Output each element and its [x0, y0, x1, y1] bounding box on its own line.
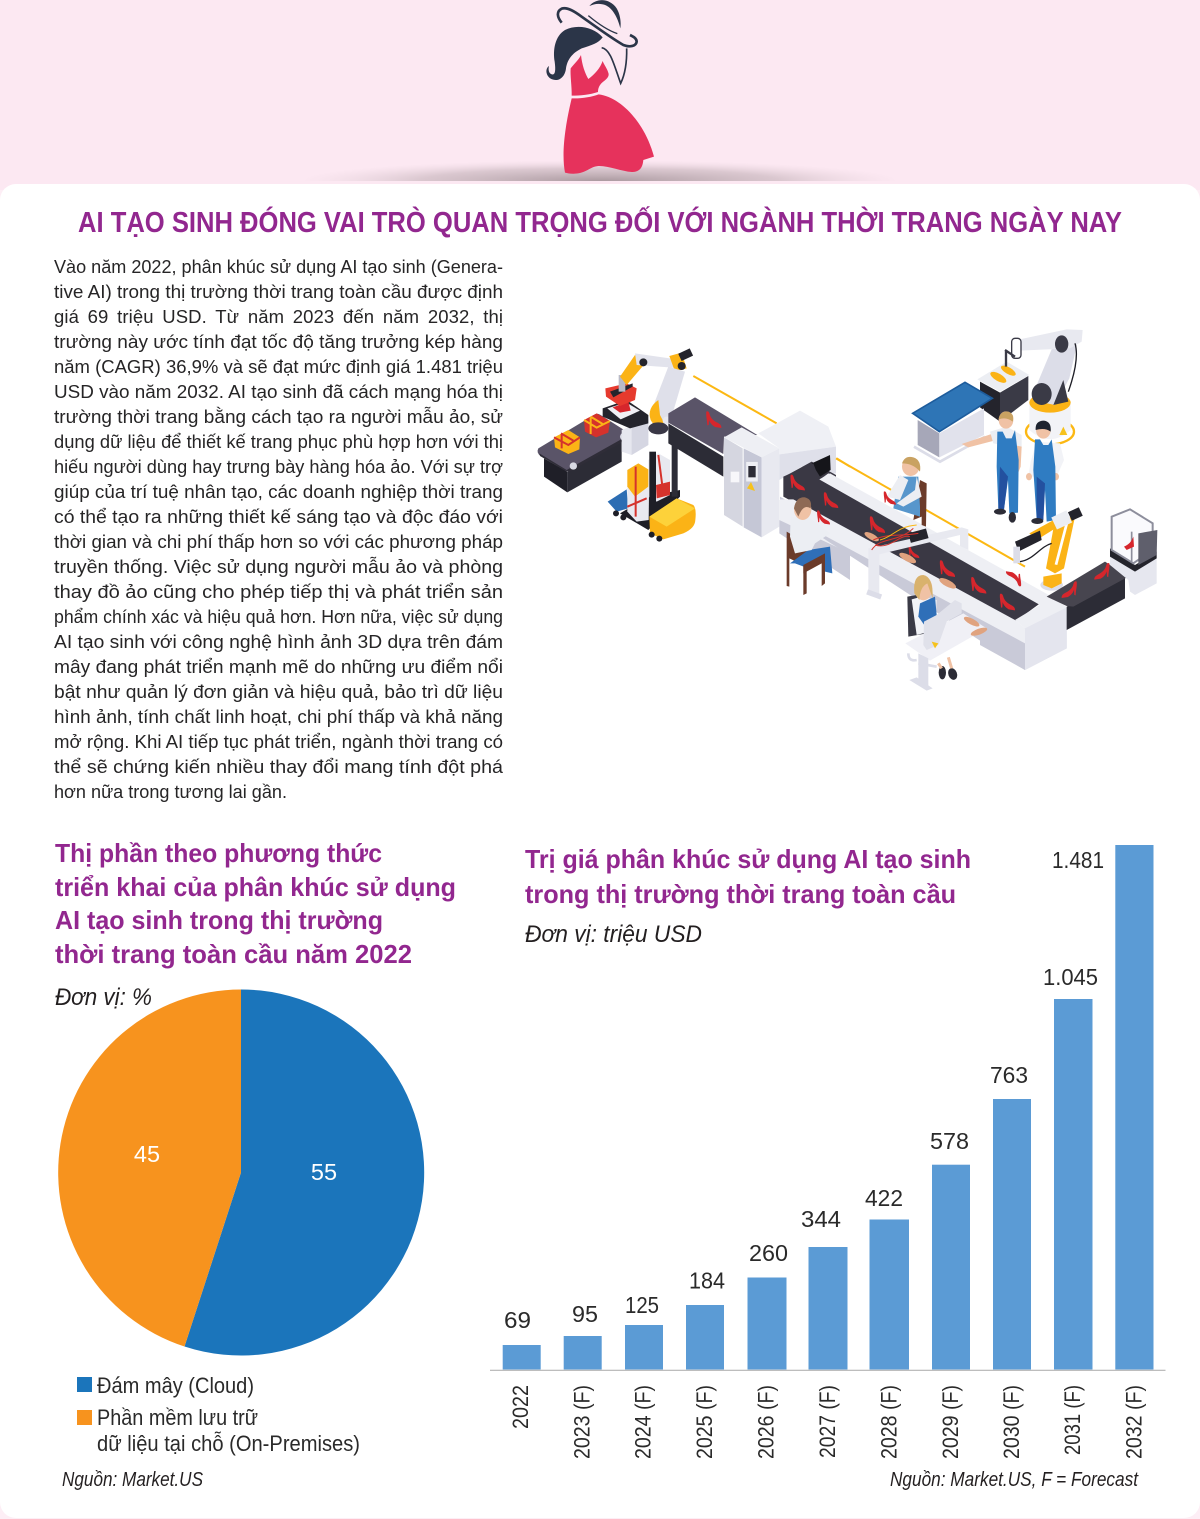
value labels: 1.045 — [1043, 964, 1098, 990]
value labels: 1.481 — [1052, 847, 1104, 873]
source: bar chart: Nguồn: Market.US, F = Forecast — [890, 1469, 1139, 1491]
text block: introduction paragraph: trường này ước tính đạt tốc độ tăng trưởng kép hàng — [54, 331, 503, 352]
value labels: 69 — [504, 1307, 531, 1333]
axis labels: 2027 (F) — [815, 1385, 840, 1458]
text block: introduction paragraph: tive AI) trong thị trường thời trang toàn cầu được định — [54, 281, 503, 302]
text block: introduction paragraph: dụng dữ liệu để thiết kế trang phục phù hợp hơn với thị — [54, 431, 503, 452]
value labels: 578 — [930, 1128, 969, 1154]
right part: main conveyor, workers, robots, printer — [780, 329, 1157, 691]
unit label: pie chart: Đơn vị: % — [55, 984, 152, 1011]
value labels: 95 — [572, 1301, 598, 1327]
text block: introduction paragraph: hiếu người dùng hay trưng bày hàng hóa ảo. Với sự trợ — [54, 456, 503, 477]
text block: introduction paragraph: USD vào năm 2032. AI tạo sinh đã cách mạng hóa thị — [54, 381, 503, 402]
text block: introduction paragraph: hình ảnh, tính chất linh hoạt, chi phí thấp và khả năng — [54, 706, 503, 727]
forklift with gift boxes — [608, 489, 628, 512]
legend: pie chart — [77, 1373, 360, 1456]
text block: introduction paragraph: giúp của trí tuệ nhân tạo, các doanh nghiệp thời trang — [54, 481, 503, 502]
text block: introduction paragraph — [54, 256, 504, 802]
heading: pie chart: triển khai của phân khúc sử dụng — [55, 872, 456, 902]
slice: cloud 55 — [184, 989, 424, 1355]
legend: pie chart: Phần mềm lưu trữ — [97, 1405, 258, 1430]
axis labels: 2023 (F) — [570, 1385, 594, 1459]
heading: bar chart: Trị giá phân khúc sử dụng AI tạo sinh — [525, 844, 971, 874]
unit label: bar chart: Đơn vị: triệu USD — [525, 921, 702, 948]
heading: pie chart — [55, 838, 456, 969]
text block: introduction paragraph: thể sẽ chứng kiến nhiều thay đổi mang tính đột phá — [54, 756, 504, 777]
text block: introduction paragraph: Vào năm 2022, phân khúc sử dụng AI tạo sinh (Genera- — [54, 256, 503, 277]
heading: pie chart: AI tạo sinh trong thị trường — [55, 905, 383, 935]
top table and robot — [980, 382, 1000, 422]
text block: introduction paragraph: năm (CAGR) 36,9% và sẽ đạt mức định giá 1.481 triệu — [54, 356, 503, 377]
header shadow — [300, 139, 900, 181]
text block: introduction paragraph: thời gian và chi phí thấp hơn so với các phương pháp — [54, 531, 503, 552]
seated worker top — [913, 480, 927, 527]
text block: introduction paragraph: phẩm chính xác và hiệu quả hơn. Hơn nữa, việc sử dụng — [54, 606, 503, 627]
text block: introduction paragraph: thay đồ ảo cũng cho phép tiếp thị và phát triển sản — [54, 581, 503, 602]
value: 55: 55 — [311, 1159, 337, 1185]
main conveyor belt — [780, 497, 1067, 670]
axis labels: 2031 (F) — [1060, 1385, 1085, 1455]
right conveyor — [1067, 577, 1125, 630]
text block: introduction paragraph: truyền thống. Việc sử dụng người mẫu ảo và phòng — [54, 556, 503, 577]
bars — [503, 845, 1154, 1370]
heading: pie chart: Thị phần theo phương thức — [55, 838, 382, 868]
illustration: isometric shoe factory — [538, 329, 1157, 691]
blue table — [918, 420, 939, 457]
axis labels: 2022 — [508, 1385, 533, 1429]
worker standing 1 — [962, 433, 997, 447]
gantry with wires — [868, 527, 968, 595]
axis labels: 2029 (F) — [938, 1385, 963, 1459]
yellow robot lower right — [1040, 579, 1063, 591]
3D printer — [1110, 550, 1157, 595]
axis labels: 2025 (F) — [692, 1385, 717, 1459]
axis labels: 2024 (F) — [630, 1385, 656, 1459]
heading: pie chart: thời trang toàn cầu năm 2022 — [55, 939, 412, 969]
slice: on-premises 45 — [58, 990, 241, 1346]
seated worker left with chair — [787, 532, 807, 595]
legend: pie chart: Đám mây (Cloud) — [97, 1373, 254, 1398]
text block: introduction paragraph: AI tạo sinh với công nghệ hình ảnh 3D dựa trên đám — [54, 631, 503, 652]
text block: introduction paragraph: mây đang phát triển mạnh mẽ do những ưu điểm nổi — [54, 656, 503, 677]
text block: introduction paragraph: có thể tạo ra những thiết kế sáng tạo và độc đáo với — [54, 506, 503, 527]
bar chart — [490, 845, 1166, 1459]
value: 45: 45 — [134, 1141, 160, 1167]
header background — [0, 0, 1200, 190]
icon: woman in red dress with hat — [546, 0, 654, 174]
value labels: 184 — [689, 1268, 725, 1294]
text block: introduction paragraph: mở rộng. Khi AI tiếp tục phát triển, ngành thời trang có — [54, 731, 503, 752]
value labels: 422 — [865, 1185, 903, 1211]
value labels: 125 — [625, 1292, 659, 1318]
axis labels: 2026 (F) — [754, 1385, 778, 1459]
seated worker front with sewing machine — [907, 595, 927, 637]
legend: pie chart: dữ liệu tại chỗ (On-Premises) — [97, 1431, 360, 1456]
axis labels — [508, 1385, 1146, 1459]
text block: introduction paragraph: bật như quản lý đơn giản và hiệu quả, bảo trì dữ liệu — [54, 681, 503, 702]
source: pie chart: Nguồn: Market.US — [62, 1469, 204, 1491]
pie chart — [58, 989, 424, 1355]
heading: bar chart: trong thị trường thời trang toàn cầu — [525, 879, 956, 909]
text block: introduction paragraph: trường thời trang bằng cách tạo ra người mẫu ảo, sử — [54, 406, 503, 427]
worker standing 2 — [1028, 442, 1064, 477]
value labels — [504, 847, 1104, 1333]
left part: gift conveyor, robot arm, forklift, tunnel — [538, 348, 850, 580]
value labels: 763 — [990, 1062, 1028, 1088]
text block: introduction paragraph: hơn nữa trong tương lai gần. — [54, 781, 287, 802]
axis labels: 2032 (F) — [1122, 1385, 1146, 1459]
text block: introduction paragraph: giá 69 triệu USD. Từ năm 2023 đến năm 2032, thị — [54, 306, 503, 327]
axis labels: 2030 (F) — [999, 1385, 1024, 1459]
heading: bar chart — [525, 844, 971, 909]
axis labels: 2028 (F) — [876, 1385, 902, 1459]
value labels: 260 — [749, 1240, 788, 1266]
value labels: 344 — [801, 1206, 841, 1232]
